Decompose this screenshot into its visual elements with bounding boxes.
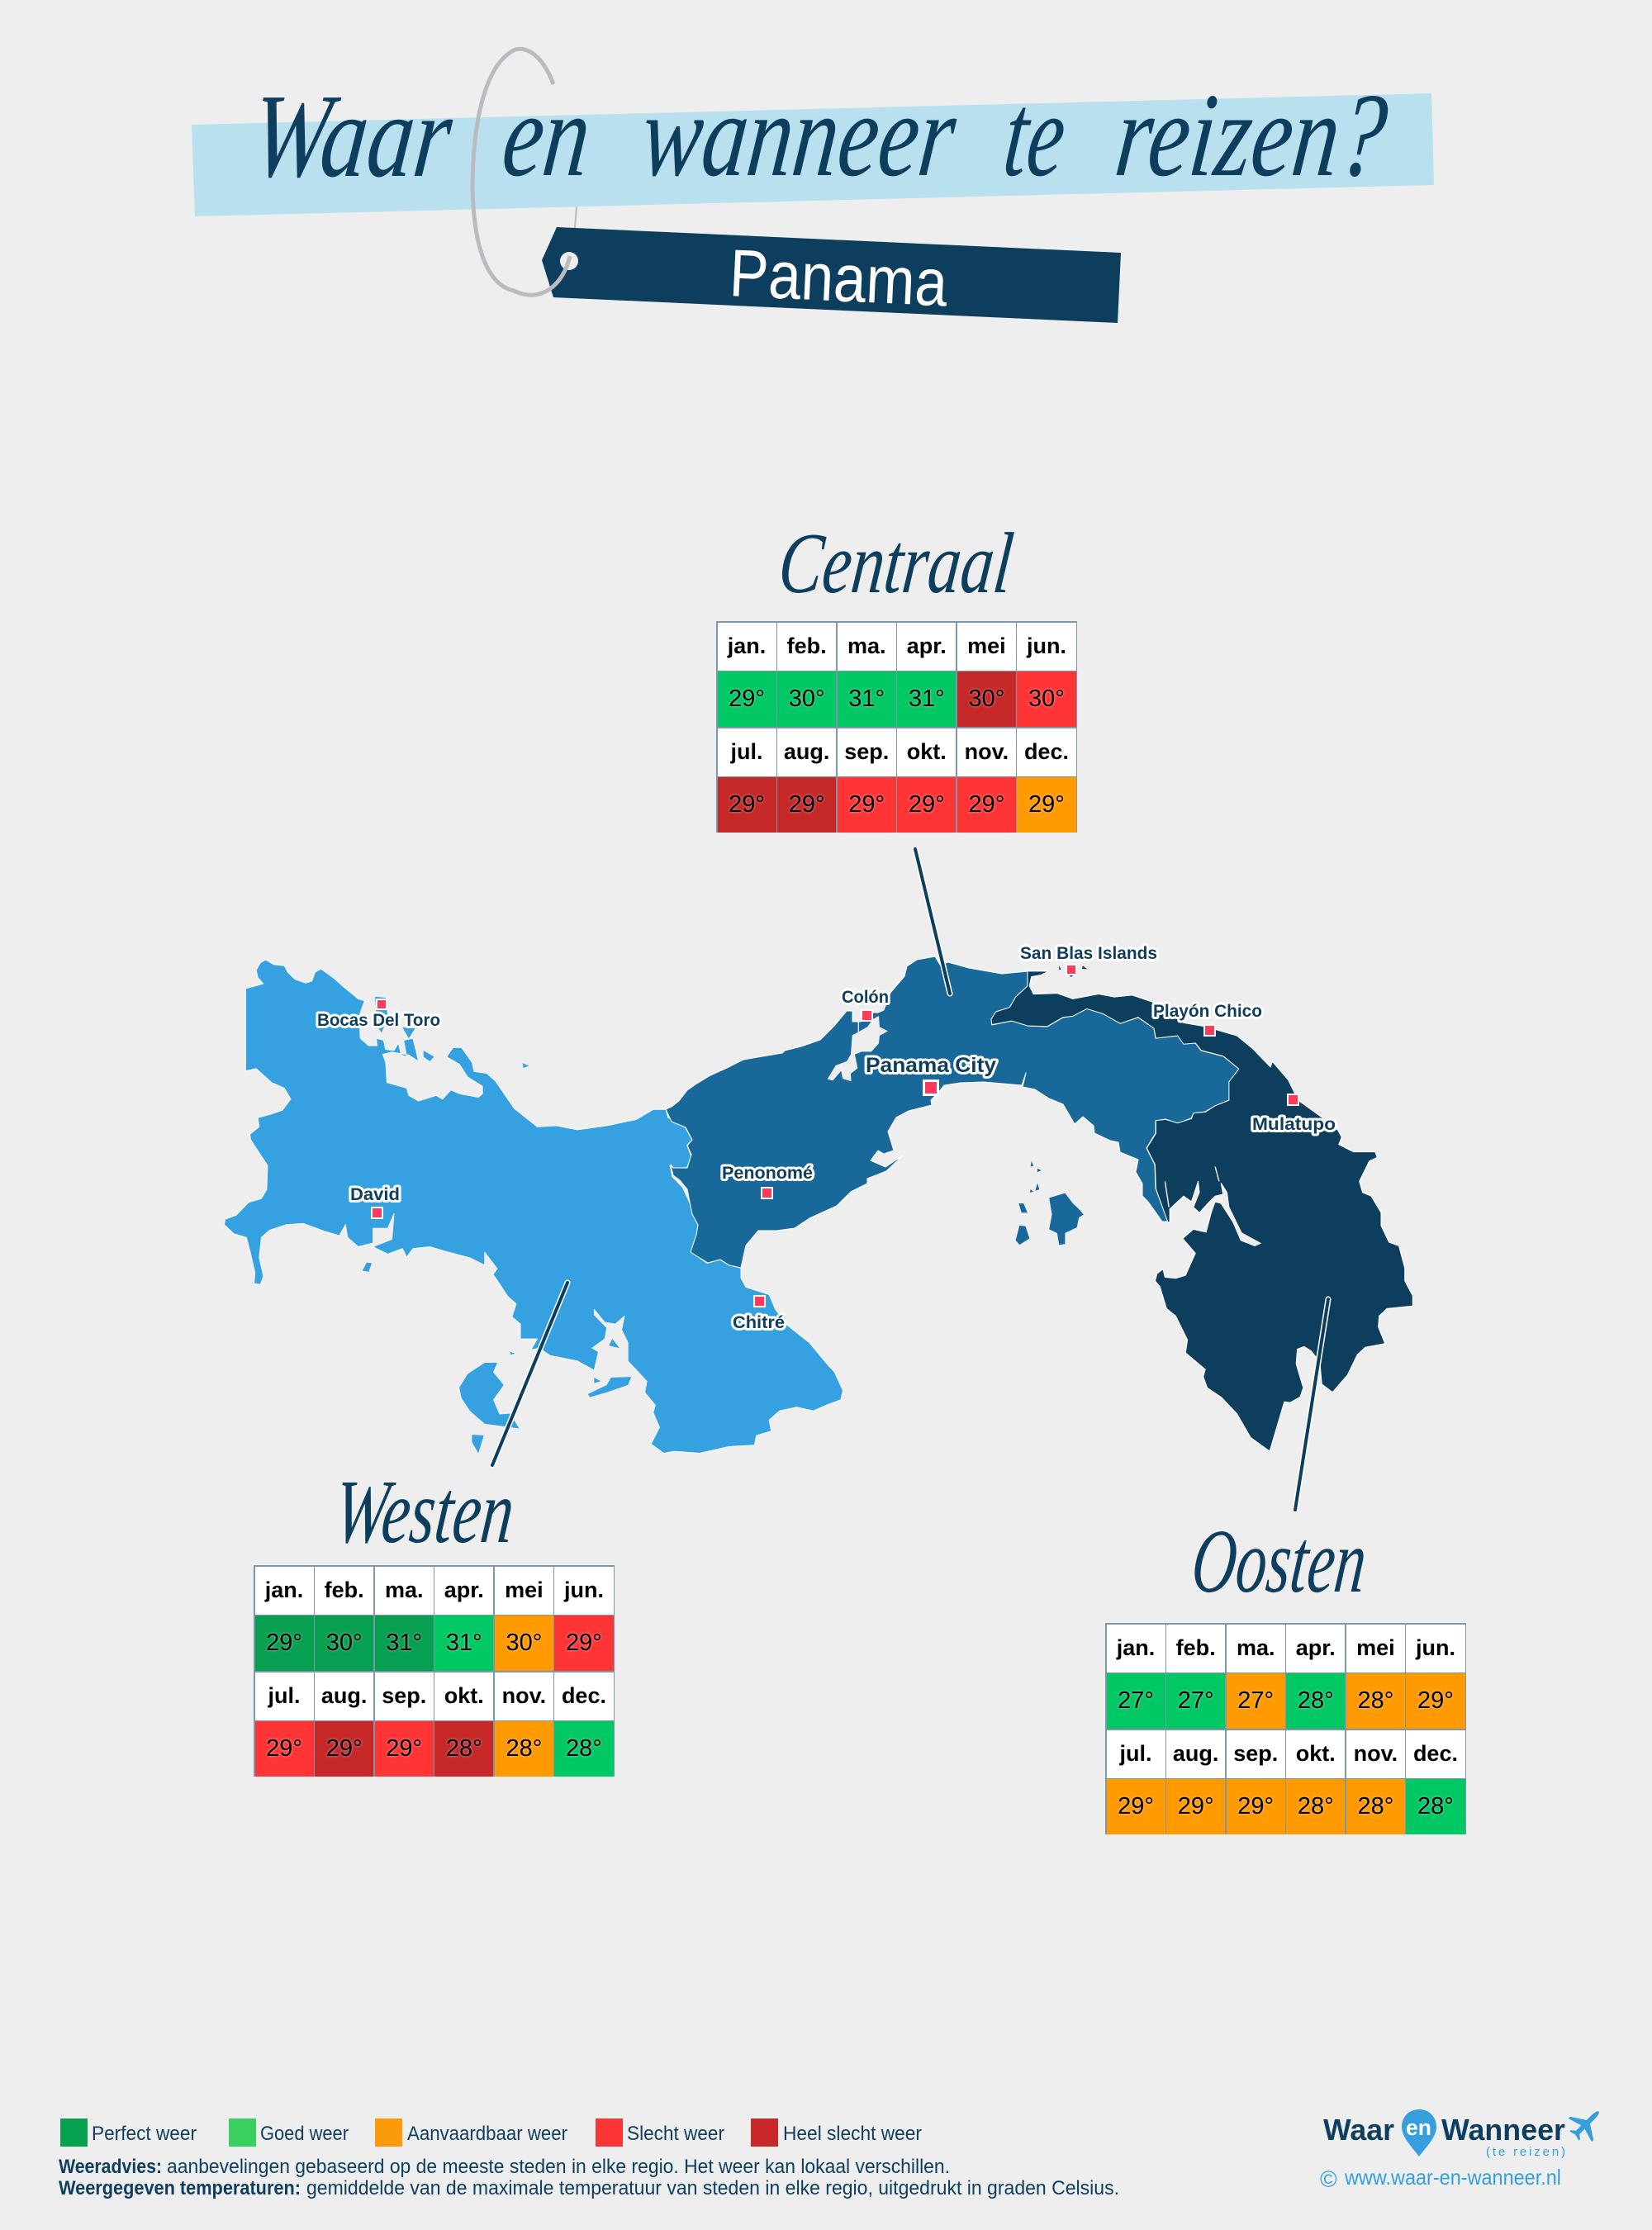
table: Oosten months: 28°: [1298, 1793, 1334, 1820]
city: Colón: [842, 988, 889, 1022]
legend: Heel slecht weer: [783, 2123, 922, 2145]
leader line: Westen: [492, 1283, 567, 1465]
website: www.waar-en-wanneer.nl: [1344, 2165, 1561, 2190]
table: Westen months: feb.: [325, 1578, 364, 1602]
table: Westen months: jun.: [564, 1578, 604, 1602]
table: Oosten months: ma.: [1237, 1635, 1275, 1660]
table: Centraal months: jul.: [731, 739, 763, 764]
table: Centraal months: okt.: [907, 739, 947, 764]
table: Oosten months: mei: [1356, 1635, 1395, 1660]
website: ©: [1320, 2166, 1337, 2192]
note: temperaturen: gemiddelde van de maximale temperatuur van steden in elke regio, uitgedrukt in graden Celsius.: [306, 2177, 1119, 2199]
table: Westen months: 30°: [326, 1630, 363, 1656]
table: Westen months: 30°: [506, 1630, 542, 1656]
table: Oosten months: okt.: [1296, 1741, 1336, 1766]
table: Centraal months: apr.: [907, 633, 947, 658]
table: Oosten months: 28°: [1357, 1793, 1393, 1820]
table: Centraal months: feb.: [787, 633, 827, 658]
table: Oosten months: 27°: [1237, 1687, 1274, 1714]
table: Centraal months: dec.: [1024, 739, 1069, 764]
table: Centraal months: 31°: [848, 686, 885, 712]
table: Centraal months: 29°: [848, 791, 885, 818]
table: Westen months: 29°: [266, 1735, 302, 1762]
table: Westen months: 31°: [386, 1630, 422, 1656]
table: Centraal months: 29°: [729, 686, 765, 712]
table: Centraal months: [716, 621, 1077, 833]
legend: Aanvaardbaar weer: [407, 2123, 567, 2145]
city: David: [350, 1185, 400, 1219]
table: Westen months: sep.: [382, 1683, 426, 1708]
country tag: Panama: [728, 236, 950, 320]
city: Panama City: [866, 1054, 996, 1096]
table: Westen months: ma.: [385, 1578, 423, 1602]
title: te: [999, 69, 1072, 202]
title: reizen?: [1110, 69, 1393, 202]
table: Oosten months: aug.: [1173, 1741, 1218, 1766]
table: Centraal months: 29°: [1028, 791, 1065, 818]
heading: Westen: Westen: [330, 1461, 519, 1562]
legend: [60, 2118, 922, 2147]
legend: Perfect weer: [92, 2123, 197, 2145]
table: Centraal months: 30°: [1028, 686, 1065, 712]
heading: Centraal: Centraal: [775, 515, 1018, 611]
table: Westen months: 28°: [566, 1735, 602, 1762]
table: Westen months: aug.: [321, 1683, 367, 1708]
table: Oosten months: 27°: [1118, 1687, 1154, 1714]
city: Panama City: Panama City: [866, 1054, 996, 1077]
table: Oosten months: jan.: [1117, 1635, 1155, 1660]
table: Oosten months: feb.: [1176, 1635, 1216, 1660]
table: Westen months: 28°: [446, 1735, 482, 1762]
logo: (te reizen): [1486, 2145, 1565, 2159]
table: Westen months: jul.: [268, 1683, 301, 1708]
region: Westen: [224, 960, 843, 1453]
legend: Slecht weer: [627, 2123, 724, 2145]
note: temperaturen: Weergegeven temperaturen:: [59, 2177, 301, 2199]
table: Oosten months: 27°: [1178, 1687, 1214, 1714]
table: Oosten months: 28°: [1417, 1793, 1454, 1820]
table: Centraal months: 29°: [789, 791, 825, 818]
table: Oosten months: sep.: [1233, 1741, 1278, 1766]
title: Waar: [246, 69, 458, 202]
table: Westen months: 31°: [446, 1630, 482, 1656]
title: [246, 69, 1393, 202]
city: Playón Chico: [1153, 1002, 1262, 1037]
city: Penonomé: [722, 1164, 813, 1199]
table: Westen months: apr.: [444, 1578, 484, 1602]
panel: Oosten: [1105, 1511, 1466, 1834]
table: Oosten months: jun.: [1416, 1635, 1455, 1660]
note: weeradvies: Weeradvies:: [59, 2156, 162, 2178]
city: San Blas Islands: [1020, 944, 1157, 975]
table: Westen months: mei: [505, 1578, 544, 1602]
table: Centraal months: 30°: [968, 686, 1004, 712]
panel: Centraal: [716, 515, 1077, 833]
region: Oosten: [991, 966, 1412, 1451]
table: Westen months: 29°: [566, 1630, 602, 1656]
table: Centraal months: 29°: [909, 791, 945, 818]
city: San Blas Islands: San Blas Islands: [1020, 944, 1157, 963]
table: Oosten months: apr.: [1296, 1635, 1336, 1660]
heading: Oosten: Oosten: [1187, 1511, 1371, 1611]
lake and canal: [828, 1016, 888, 1081]
city: Chitré: [733, 1295, 785, 1332]
table: Oosten months: 28°: [1357, 1687, 1393, 1714]
logo: Wanneer: [1441, 2113, 1565, 2147]
table: Westen months: nov.: [502, 1683, 546, 1708]
table: Westen months: dec.: [562, 1683, 606, 1708]
table: Oosten months: 29°: [1178, 1793, 1214, 1820]
table: Centraal months: 29°: [968, 791, 1004, 818]
table: Westen months: 29°: [266, 1630, 302, 1656]
table: Oosten months: jul.: [1120, 1741, 1152, 1766]
table: Westen months: 29°: [386, 1735, 422, 1762]
table: Centraal months: mei: [967, 633, 1006, 658]
title: en: [497, 69, 597, 202]
city: Penonomé: Penonomé: [722, 1164, 813, 1183]
string behind band: [575, 206, 577, 228]
table: Oosten months: [1105, 1623, 1466, 1834]
islands: Pearl archipelago: [1016, 1161, 1084, 1245]
table: Centraal months: aug.: [784, 739, 829, 764]
table: Oosten months: nov.: [1354, 1741, 1398, 1766]
logo: en: [1406, 2115, 1431, 2140]
region: Centraal: [666, 956, 1239, 1268]
city: Bocas Del Toro: Bocas Del Toro: [317, 1011, 440, 1030]
legend: Goed weer: [260, 2123, 349, 2145]
panel: Westen: [254, 1461, 615, 1777]
city: Bocas Del Toro: [317, 999, 440, 1030]
city: Colón: Colón: [842, 988, 889, 1007]
table: Oosten months: 29°: [1118, 1793, 1154, 1820]
note: weeradvies: aanbevelingen gebaseerd op de meeste steden in elke regio. Het weer kan lokaal verschillen.: [167, 2156, 950, 2178]
table: Oosten months: 29°: [1417, 1687, 1454, 1714]
table: Oosten months: dec.: [1413, 1741, 1458, 1766]
title band: [192, 93, 1434, 216]
leader line: Centraal: [915, 849, 950, 994]
logo: [1323, 2100, 1611, 2159]
table: Centraal months: sep.: [844, 739, 889, 764]
leader line: Oosten: [1295, 1299, 1328, 1510]
table: Oosten months: 29°: [1237, 1793, 1274, 1820]
city: Playón Chico: Playón Chico: [1153, 1002, 1262, 1021]
table: Centraal months: 29°: [729, 791, 765, 818]
city: Mulatupo: [1252, 1094, 1336, 1134]
tag string: [472, 49, 570, 295]
table: Centraal months: jun.: [1027, 633, 1066, 658]
table: Westen months: okt.: [444, 1683, 484, 1708]
table: Centraal months: jan.: [728, 633, 766, 658]
logo: Waar: [1323, 2113, 1394, 2147]
table: Oosten months: 28°: [1298, 1687, 1334, 1714]
city: Chitré: Chitré: [733, 1313, 785, 1332]
table: Westen months: 28°: [506, 1735, 542, 1762]
header: title and country tag: [192, 46, 1434, 323]
table: Westen months: jan.: [265, 1578, 303, 1602]
table: Centraal months: 31°: [909, 686, 945, 712]
city: David: David: [350, 1185, 400, 1204]
table: Westen months: 29°: [326, 1735, 363, 1762]
table: Centraal months: 30°: [789, 686, 825, 712]
city: Mulatupo: Mulatupo: [1252, 1115, 1336, 1134]
country tag: [542, 227, 1121, 323]
title: wanneer: [636, 69, 962, 202]
table: Centraal months: nov.: [965, 739, 1009, 764]
table: Westen months: [254, 1565, 615, 1777]
table: Centraal months: ma.: [847, 633, 885, 658]
